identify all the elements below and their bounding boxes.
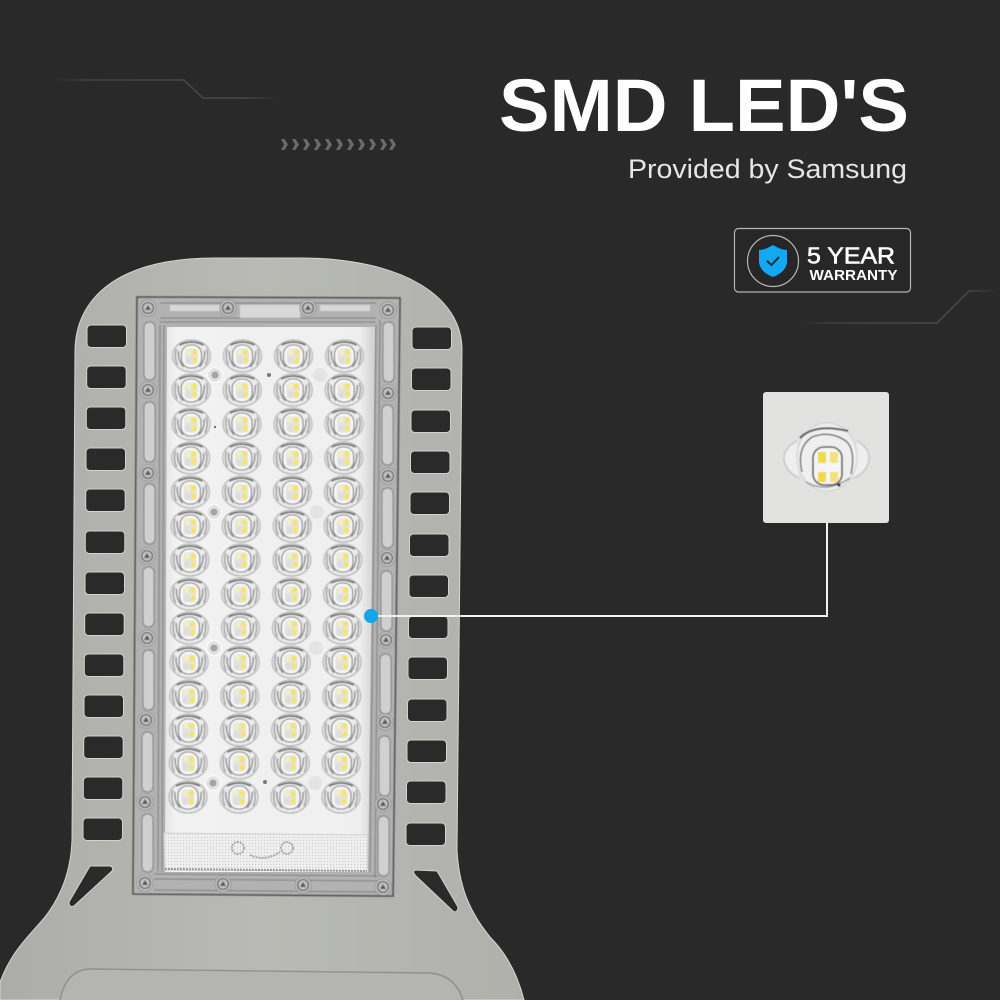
left vent slots [83,325,126,840]
lamp housing [0,258,524,1000]
LED grid [169,340,364,813]
title: SMD LED'S [499,64,909,147]
callout dot [364,609,378,623]
LED board [165,327,375,872]
decorative circuit line: upper left [45,80,280,98]
street lamp [0,258,524,1000]
diffuser strip [164,833,368,871]
callout card: LED close-up [763,392,889,523]
subtitle: Provided by Samsung [628,154,907,184]
triangular vents [69,866,458,912]
LED module frame [133,297,400,896]
badge text: 5 YEAR [807,242,895,268]
decorative circuit line: right [798,291,1000,323]
right vent slots [406,327,452,846]
warranty badge [734,228,910,292]
callout connector line [371,522,827,616]
badge text: WARRANTY [810,267,898,284]
frame screws [137,300,396,895]
icon: shield [748,236,798,286]
lower cover recess [60,969,463,1000]
board markers [206,368,327,790]
badge text [807,242,898,284]
chevron row [281,139,396,150]
